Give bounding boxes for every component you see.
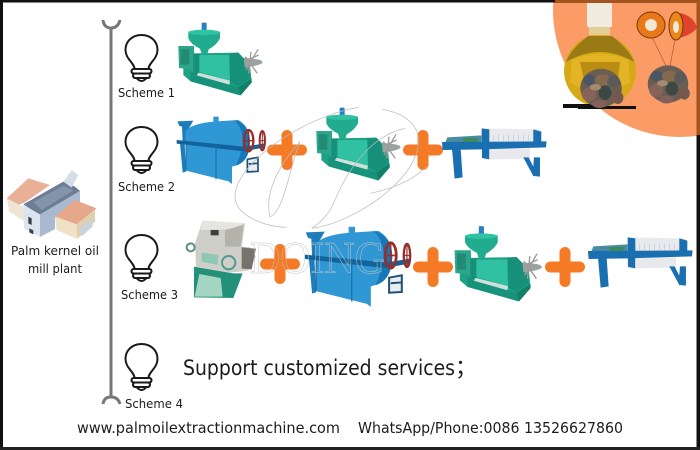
plus: scheme 2 second [403,130,443,170]
label: scheme 3: Scheme 3 [121,288,178,302]
label: scheme 1: Scheme 1 [118,86,175,100]
plus: scheme 3 first [260,244,300,284]
icon: bulb scheme 2 [126,127,158,173]
plus: scheme 3 second [413,247,453,287]
label: palm kernel oil: Palm kernel oil [11,244,99,258]
plus: scheme 3 third [545,247,585,287]
plus: scheme 2 first [267,130,307,170]
heading: support customized services: ； [455,356,477,381]
group: oil flask [563,3,636,109]
label: mill plant: mill plant [28,262,82,276]
illustration: palm kernel oil mill plant [7,170,97,239]
watermark: brand text: DOING [250,233,385,283]
heading: support customized services: Support customized services [183,356,455,380]
icon: bulb scheme 3 [126,235,158,281]
label: scheme 2: Scheme 2 [118,180,175,194]
machine: scheme 2 roaster [177,117,265,184]
watermark: logo [235,107,427,228]
machine: scheme 3 oil press [455,226,542,301]
machine: scheme 3 roaster [305,227,410,307]
footer: phone: WhatsApp/Phone:0086 13526627860 [358,419,623,437]
icon: bulb scheme 1 [126,35,158,81]
machine: scheme 3 cleaner [187,221,256,298]
icon: bulb scheme 4 [126,344,158,390]
footer: website: www.palmoilextractionmachine.com [77,419,340,437]
machine: scheme 3 filter press [588,237,693,288]
machine: scheme 1 oil press [178,23,262,95]
timeline: vertical line with end caps [103,20,120,404]
machine: scheme 2 filter press [442,128,547,179]
group: palm fruit and nuts [637,12,697,104]
panel: orange corner circle [553,0,700,137]
label: scheme 4: Scheme 4 [125,397,183,411]
machine: scheme 2 oil press [316,108,400,180]
